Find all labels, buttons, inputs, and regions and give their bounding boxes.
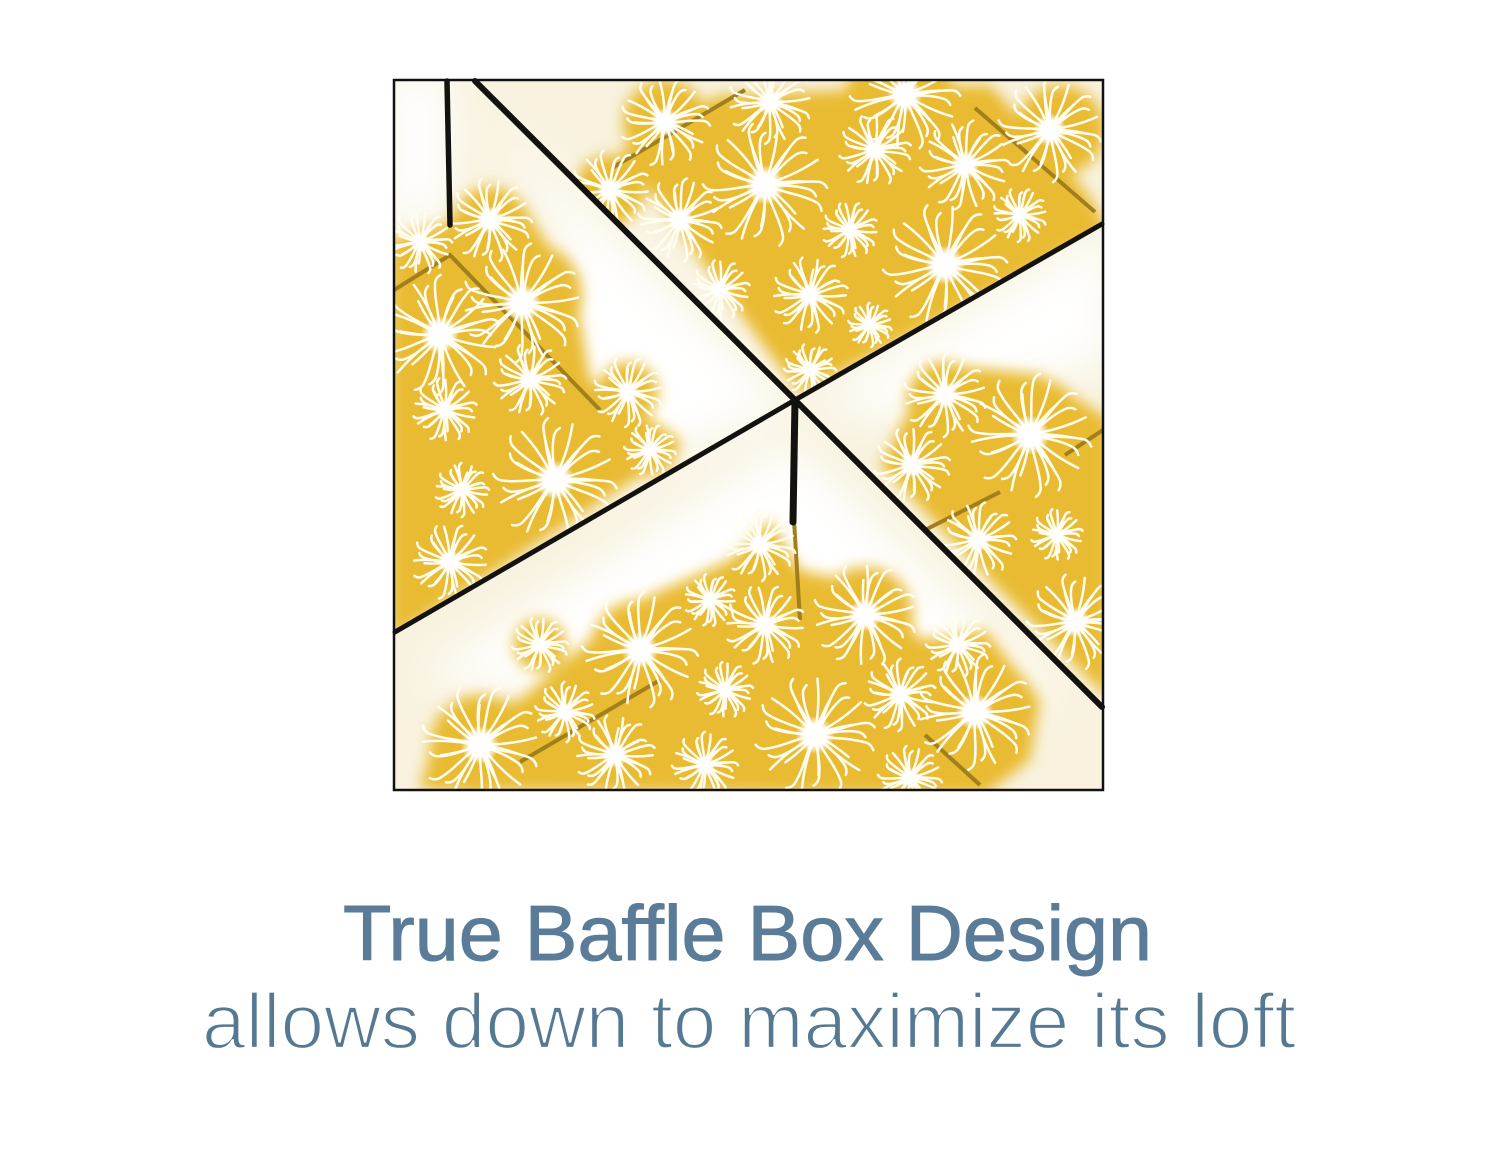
right chamber down fill [871, 350, 1102, 702]
infographic canvas [206, 78, 1294, 1048]
baffle walls [395, 81, 1102, 707]
baffle box diagram [392, 78, 1105, 792]
right chamber down clusters [873, 354, 1102, 670]
bottom chamber yellow down [420, 520, 1040, 795]
top chamber yellow down [568, 81, 1102, 396]
right chamber yellow down [880, 362, 1110, 700]
top chamber down fill [568, 81, 1102, 396]
box interior cream shading [385, 70, 1110, 790]
box outline [394, 80, 1103, 790]
left chamber yellow down [390, 187, 680, 640]
subheading: allows down to maximize its loft [202, 977, 1296, 1065]
bottom chamber down clusters [422, 508, 1031, 789]
top chamber down clusters [574, 81, 1102, 392]
left chamber down fill [395, 176, 691, 629]
bottom chamber down fill [411, 508, 1050, 789]
left chamber down clusters [395, 178, 677, 600]
heading: True Baffle Box Design [343, 889, 1152, 977]
